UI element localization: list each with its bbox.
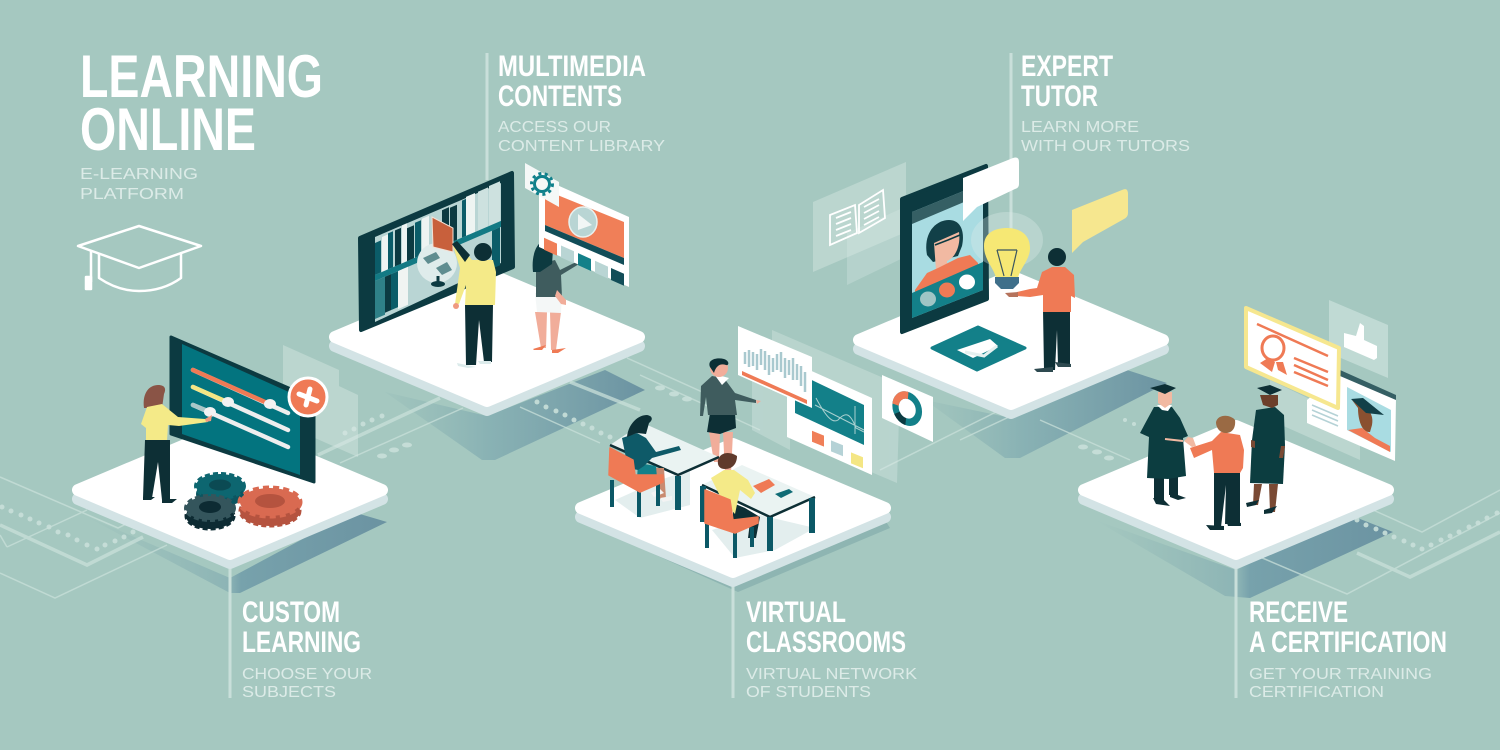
person at tablet [141,385,212,503]
heading: expert tutor [1021,50,1190,155]
globe [417,243,457,287]
student on left chair [622,415,681,502]
title [80,43,323,163]
heading: receive a certification [1249,596,1447,701]
teal chart panel [787,360,872,475]
heading: virtual classrooms: CLASSROOMS [746,626,906,659]
panel: expert tutor platform [813,158,1163,413]
icon: graduation cap outline [78,226,201,291]
heading: multimedia contents [498,50,665,155]
heading: multimedia contents: ACCESS OUR [498,119,611,136]
white speech bubble [963,158,1019,221]
yellow speech bubble [1072,189,1128,253]
front table with student [610,423,719,510]
heading: receive a certification: A CERTIFICATION [1249,626,1447,659]
rear chair [705,490,758,558]
heading: virtual classrooms: VIRTUAL NETWORK [746,666,917,683]
tablet with sliders [171,337,314,482]
certificate with rosette [1246,308,1339,408]
video call tablet [902,166,987,332]
tablet with bookshelf [360,173,513,330]
subtitle: PLATFORM [80,186,184,203]
graduate with gown [1140,384,1188,506]
heading: expert tutor: EXPERT [1021,50,1113,83]
subtitle: E-LEARNING [80,166,198,183]
title: LEARNING [80,43,323,110]
donut chart card [882,375,933,442]
icon: gear card [525,163,559,207]
platform shadows [83,370,1393,598]
translucent panels behind tablet [283,345,358,457]
heading: receive a certification: CERTIFICATION [1249,684,1384,701]
rear table with student [702,453,815,551]
panel: certification platform [1084,300,1396,563]
heading: virtual classrooms: VIRTUAL [746,596,846,629]
heading: expert tutor: LEARN MORE [1021,119,1139,136]
heading: multimedia contents: CONTENT LIBRARY [498,138,665,155]
heading: multimedia contents: MULTIMEDIA [498,50,646,83]
left chair [609,448,663,517]
heading: custom learning: CUSTOM [242,596,340,629]
icon: graduation cap card [932,327,1025,370]
teacher [700,358,761,474]
heading: multimedia contents: CONTENTS [498,80,622,113]
icon: gears [186,474,300,529]
heading: custom learning: SUBJECTS [242,684,336,701]
heading: virtual classrooms [746,596,917,701]
heading: custom learning: CHOOSE YOUR [242,666,372,683]
title: ONLINE [80,96,256,163]
panel: multimedia contents platform [335,163,639,410]
thumbs up card [1329,300,1388,378]
man reaching for book [452,241,496,368]
man with bulb [1005,248,1075,372]
icon: plus badge [289,378,327,416]
floor shading under desks [615,470,815,558]
student profile card [1307,370,1396,461]
line chart panel [738,326,812,408]
icon: open book on translucent panels [813,162,906,285]
panel: virtual classrooms platform [581,326,933,581]
heading: receive a certification: GET YOUR TRAINING [1249,666,1432,683]
video panel [539,177,629,287]
heading: custom learning: LEARNING [242,626,361,659]
subtitle [80,166,198,203]
heading: expert tutor: TUTOR [1021,80,1098,113]
icon: light bulb [971,212,1043,289]
translucent panels behind charts [752,330,900,483]
translucent panel [1270,380,1360,460]
woman touching screen [533,240,579,353]
orange book [432,217,453,252]
heading: virtual classrooms: OF STUDENTS [746,684,871,701]
heading: expert tutor: WITH OUR TUTORS [1021,138,1190,155]
panel: custom learning platform [78,337,382,563]
person shaking hands [1184,416,1244,530]
female graduate [1246,385,1285,514]
heading: custom learning [242,596,372,701]
heading: receive a certification: RECEIVE [1249,596,1348,629]
